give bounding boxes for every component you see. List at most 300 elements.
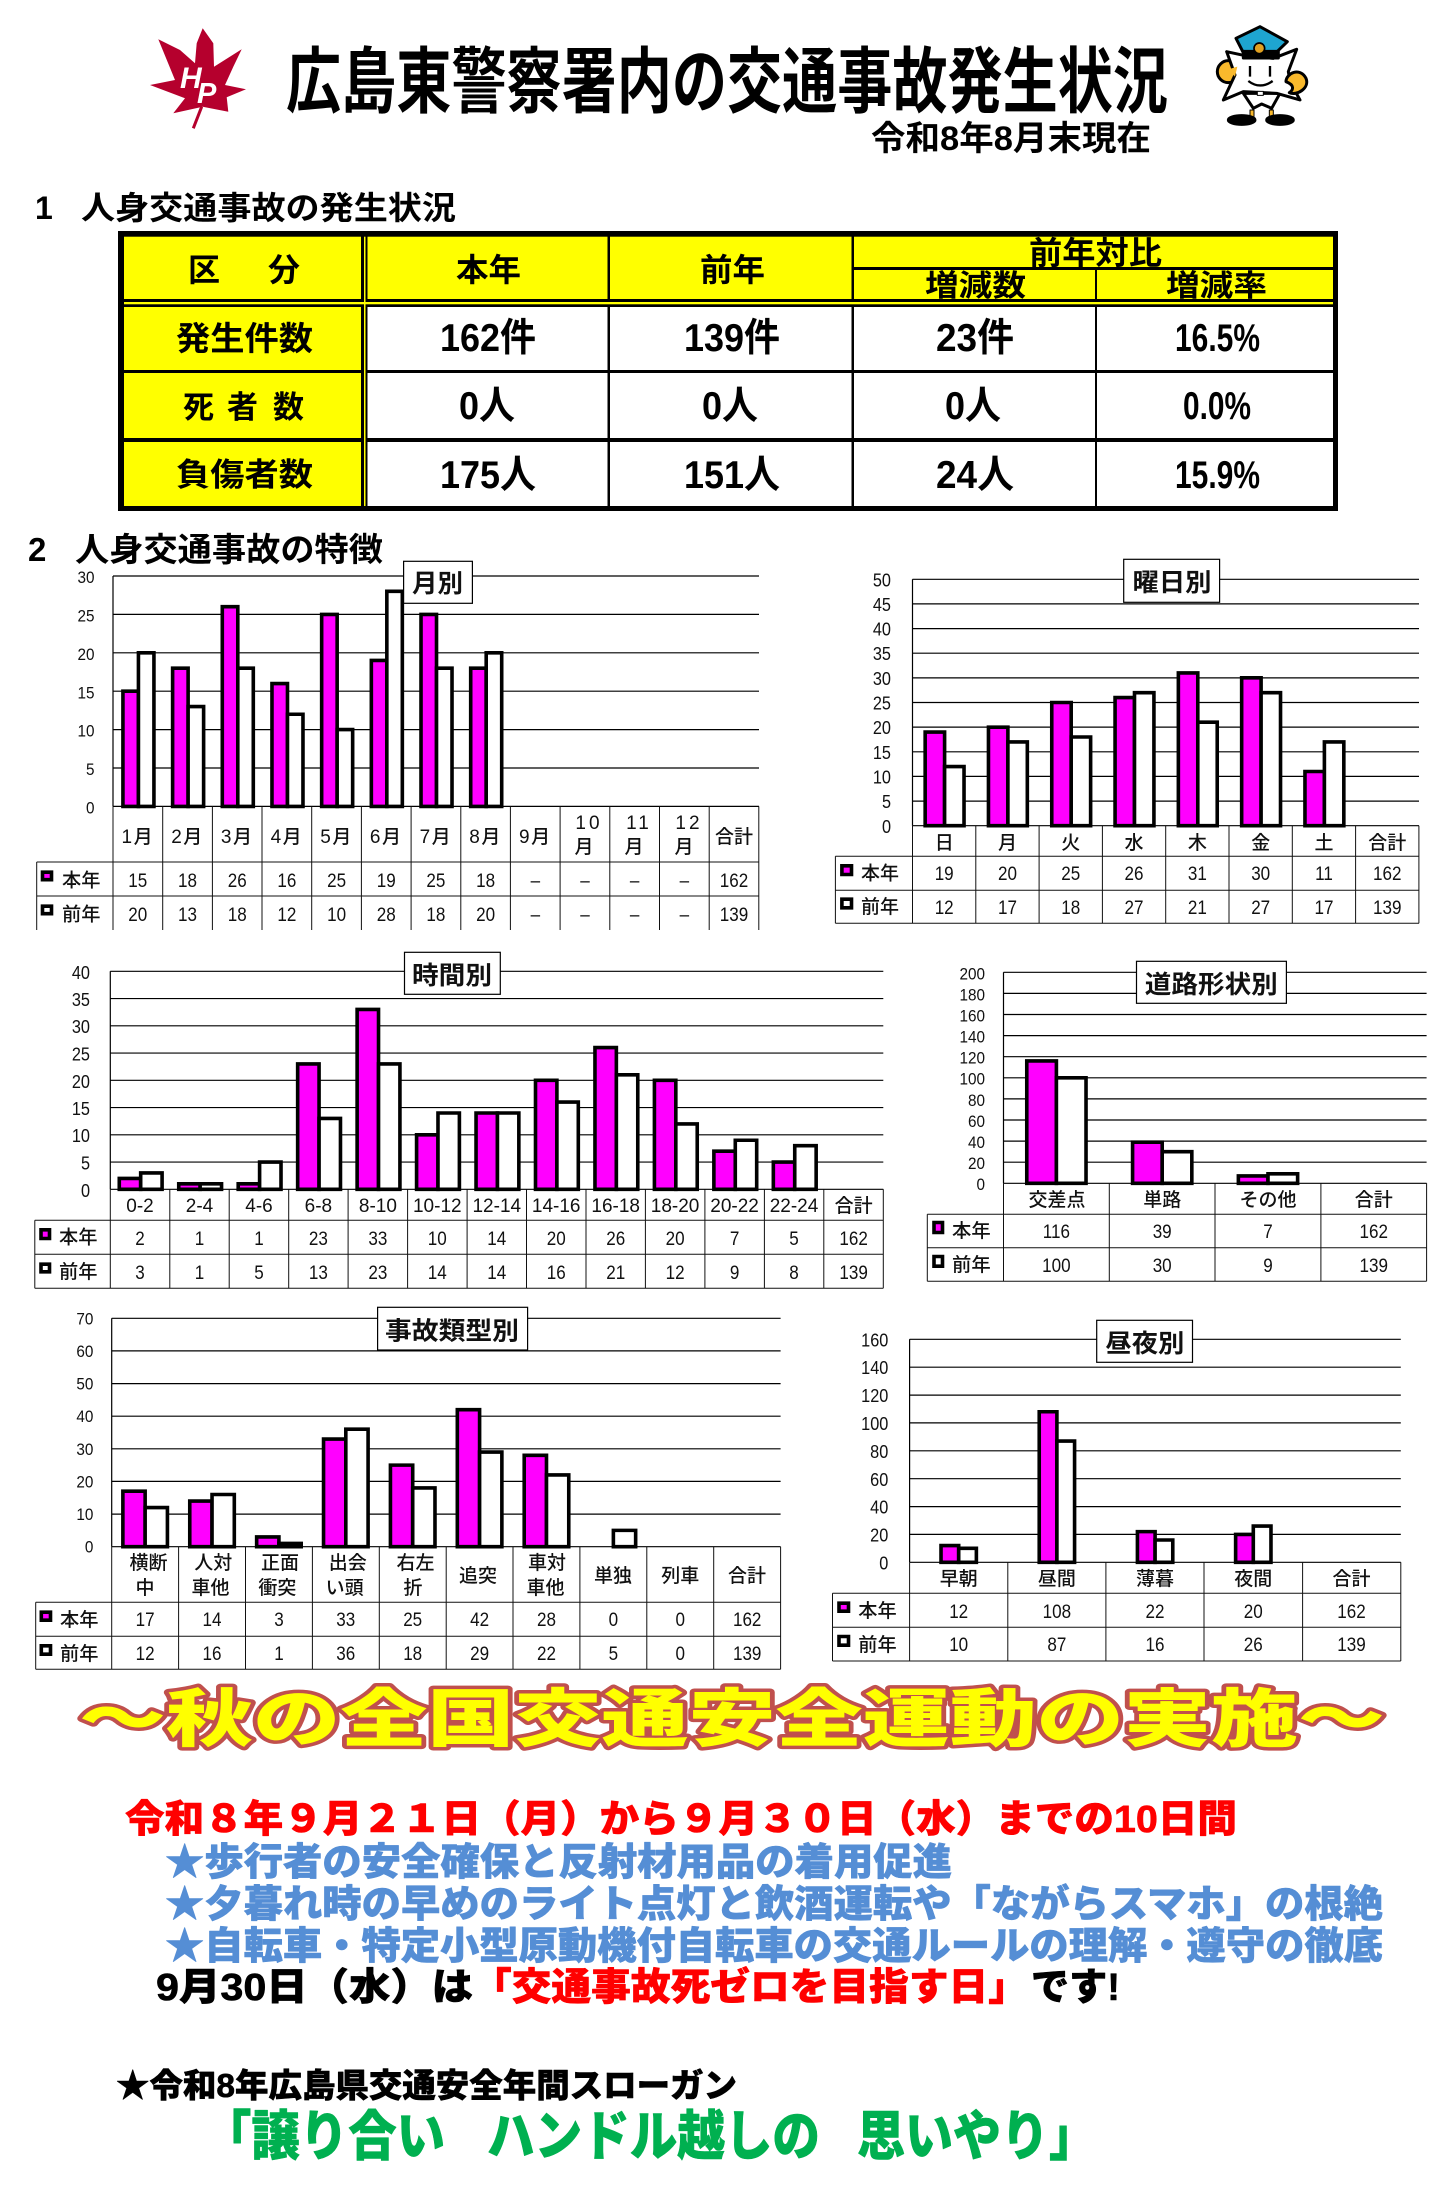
month labels: 11 [626,813,652,834]
time-band labels: 6-8 [305,1196,332,1217]
row: 本年: 0 [609,1608,618,1630]
row: 本年: 本年 [952,1220,991,1242]
row: 前年: 前年 [952,1254,991,1276]
y axis labels: 40 [76,1407,93,1426]
time-band labels: 12-14 [472,1196,522,1217]
row: 前年: 139 [1337,1633,1366,1655]
row: 前年 [934,1254,1388,1276]
row: 本年: – [630,869,640,891]
row: 本年: 2 [135,1227,145,1249]
chart title: 昼夜別 [1097,1320,1192,1362]
bars: monthly counts [123,591,502,806]
panel: accident summary table [118,231,1338,511]
y axis labels: 80 [870,1441,888,1462]
y axis labels: 25 [873,693,891,714]
slogan: 思いやり」 [857,2107,1097,2167]
campaign point 1: ★歩行者の安全確保と反射材用品の着用促進 [165,1842,952,1884]
heading: section 2: 人身交通事故の特徴 [75,531,383,568]
table row: 死者数: 0人 [702,385,758,428]
row: 前年: 13 [178,903,197,925]
y axis labels: 70 [76,1310,93,1329]
road-shape labels: 交差点 [1028,1189,1086,1211]
y axis labels [861,1330,888,1574]
row: 前年: 100 [1042,1254,1071,1276]
row: 本年: – [580,869,591,891]
row: 本年: 26 [1125,862,1143,884]
y axis labels: 5 [86,760,94,779]
accident-type labels [129,1552,766,1599]
time-band labels: 18-20 [651,1196,699,1217]
y axis labels: 60 [968,1112,985,1131]
row: 本年: 本年 [858,1600,897,1622]
table row: 死者数: 0人 [459,385,515,428]
row: 前年: 87 [1047,1633,1066,1655]
row: 前年: 14 [487,1261,506,1283]
table row: 発生件数: 23件 [936,317,1014,360]
time-band labels: 合計 [835,1195,873,1217]
slogan [203,2107,1097,2167]
row: 前年: 21 [606,1261,625,1283]
row: 前年: 12 [666,1261,685,1283]
y axis labels [77,568,95,818]
table row: 死者数: 0.0% [1183,385,1251,428]
y axis labels: 45 [873,594,891,615]
row: 本年: 11 [1315,862,1333,884]
row: 前年: 27 [1251,896,1270,918]
row: 本年: 162 [733,1608,761,1630]
row: 前年 [842,896,1402,918]
row: 前年: 18 [1061,896,1080,918]
y axis labels: 40 [870,1497,888,1518]
panel: chart by time of day [35,952,883,1288]
row: 本年: 25 [403,1608,422,1630]
y axis labels: 30 [76,1440,93,1459]
row: 前年 [41,1642,761,1665]
y axis labels: 180 [959,986,985,1005]
month labels: 3月 [221,827,253,848]
y axis labels: 50 [76,1375,93,1394]
row: 前年: 5 [609,1642,618,1664]
row: 前年: 17 [1315,896,1333,918]
y axis labels: 5 [882,791,891,812]
chart title: 月別: 月別 [412,570,463,598]
row: 本年: 20 [998,862,1017,884]
row: 本年: 10 [428,1227,447,1249]
y axis labels: 20 [873,717,891,738]
row: 本年: – [531,869,541,891]
row: 本年: 16 [277,869,296,891]
row: 本年: 162 [1337,1600,1366,1622]
row: 本年: – [680,869,690,891]
row: 前年: 8 [789,1261,799,1283]
row: 本年: 162 [839,1227,868,1249]
y axis labels: 0 [882,816,891,837]
row: 前年: 0 [676,1642,685,1664]
row: 前年: 前年 [60,1643,98,1665]
row: 本年: 5 [789,1227,799,1249]
accident-type labels: 右左 [396,1552,435,1574]
row: 本年: 18 [178,869,197,891]
row: 前年: 18 [426,903,445,925]
month labels: 6月 [370,827,402,848]
time-period labels: 昼間 [1038,1569,1076,1590]
row: 前年: 30 [1153,1254,1172,1276]
time-band labels: 4-6 [245,1196,273,1217]
y axis labels: 20 [77,645,95,664]
row: 前年: 20 [128,903,147,925]
y axis labels: 0 [85,1538,93,1557]
table row: 発生件数: 162件 [440,317,536,360]
accident-type labels: 人対 [194,1552,232,1574]
row: 前年: 16 [1146,1633,1164,1655]
row: 前年: 10 [949,1633,968,1655]
y axis labels: 0 [879,1553,888,1574]
row: 本年 [41,1608,761,1631]
chart title: 昼夜別: 昼夜別 [1105,1330,1184,1358]
chart title: 事故類型別 [378,1307,528,1350]
y axis labels: 15 [77,684,95,703]
row: 本年: 162 [720,869,748,891]
table row: 負傷者数: 15.9% [1175,454,1260,497]
y axis labels: 20 [72,1071,90,1092]
icon: maple leaf HP logo: P [197,78,217,110]
y axis labels: 40 [968,1133,985,1152]
campaign dates: 令和８年９月２１日（月）から９月３０日（水）までの10日間 [125,1799,1237,1841]
time-period labels: 合計 [1332,1568,1371,1590]
accident-type labels: い頭 [326,1578,364,1599]
y axis labels: 120 [861,1385,888,1406]
y axis labels: 100 [861,1413,888,1434]
y axis labels: 60 [76,1342,93,1361]
row: 前年 [41,1261,868,1283]
row: 本年: 7 [730,1227,739,1249]
row: 前年: 前年 [59,1261,98,1283]
row: 前年: 12 [136,1642,155,1664]
month labels: 月 [624,837,644,858]
row: 本年: 108 [1043,1600,1071,1622]
banner: autumn traffic safety campaign: 〜秋の全国交通安全運動の実施〜 [79,1685,1385,1755]
time-band labels: 8-10 [359,1196,397,1217]
row: 本年 [41,1226,868,1249]
table row: 発生件数: 16.5% [1175,317,1260,360]
chart title: 事故類型別: 事故類型別 [385,1318,519,1346]
panel: chart by day and night [832,1320,1401,1661]
y axis labels: 5 [81,1153,90,1174]
icon: maple leaf HP logo [150,28,246,128]
month labels: 9月 [519,827,552,848]
y axis labels: 20 [968,1154,985,1173]
row: 本年: 26 [606,1227,625,1249]
row: 前年: 9 [730,1261,739,1283]
heading: section 2: 2 [28,531,46,568]
row: 前年: 23 [368,1261,387,1283]
row: 前年: 17 [998,896,1017,918]
row: 前年: 27 [1125,896,1143,918]
row: 本年: 33 [368,1227,387,1249]
y axis labels: 200 [959,965,985,984]
row: 本年: 本年 [60,1609,98,1631]
table row: 負傷者数 [176,454,1260,497]
y axis labels [959,965,985,1194]
table header row: 区分 [188,252,300,288]
month labels: 10 [575,813,603,834]
row: 前年: 前年 [62,904,100,926]
y axis labels [76,1310,93,1557]
month labels: 合計 [715,826,753,848]
accident-type labels: 合計 [728,1565,766,1587]
y axis labels: 140 [959,1028,985,1047]
zero fatality day message: 9月30日（水）は [156,1967,473,2009]
row: 本年: 25 [327,869,346,891]
row: 前年: 26 [1244,1633,1263,1655]
row: 本年: 162 [1373,862,1402,884]
panel: chart by accident type [36,1307,781,1669]
month labels: 月 [574,837,594,858]
chart title: 月別 [404,561,472,603]
weekday labels: 合計 [1368,832,1406,854]
bars: day-night counts [941,1412,1271,1562]
row: 本年: 28 [537,1608,556,1630]
row: 前年: 12 [277,903,296,925]
y axis labels [873,570,891,837]
icon: police mascot [1217,27,1307,124]
table header row: 前年対比 [1029,235,1162,271]
icon: maple leaf HP logo: H [180,62,203,95]
y axis labels: 140 [861,1357,888,1378]
row: 本年: 23 [309,1227,328,1249]
table header row: 本年 [456,252,521,288]
bars: time-of-day counts [119,1009,816,1189]
time-period labels: 夜間 [1234,1568,1272,1590]
weekday labels: 月 [998,833,1017,854]
road-shape labels: 単路 [1143,1189,1181,1211]
row: 前年 [42,903,748,926]
accident-type labels: 折 [403,1577,423,1599]
row: 前年: 139 [733,1642,761,1664]
row: 本年: 12 [949,1600,968,1622]
y axis labels: 0 [86,799,94,818]
road-shape labels [1028,1189,1393,1211]
row: 前年: 28 [377,903,396,925]
y axis labels: 10 [76,1505,93,1524]
table header row: 増減率 [1166,270,1267,303]
time-period labels: 早朝 [940,1568,978,1590]
accident-type labels: 車対 [528,1552,566,1574]
row: 前年: 16 [203,1642,221,1664]
row: 本年: 本年 [59,1226,98,1248]
weekday labels: 金 [1251,832,1270,854]
row: 前年: – [531,903,541,925]
table row: 負傷者数: 175人 [440,454,536,497]
row: 本年: 25 [426,869,445,891]
y axis labels: 10 [873,767,891,788]
row: 前年: – [630,903,640,925]
table row: 発生件数: 発生件数 [176,320,313,357]
table row: 負傷者数: 負傷者数 [176,456,313,492]
accident-type labels: 車他 [191,1577,230,1599]
accident-type labels: 衝突 [258,1577,296,1599]
row: 前年: 36 [336,1642,355,1664]
row: 本年: 20 [547,1227,566,1249]
row: 前年: 139 [1373,896,1402,918]
row: 前年: 1 [274,1642,284,1664]
row: 前年: 1 [195,1261,204,1283]
y axis labels: 40 [873,619,891,640]
y axis labels: 160 [861,1330,888,1351]
y axis labels: 50 [873,570,891,591]
zero fatality day message [156,1966,1120,2009]
month labels: 5月 [320,827,353,848]
table header row [188,235,1267,303]
weekday labels: 水 [1124,832,1144,854]
month labels [122,813,753,858]
chart title: 道路形状別: 道路形状別 [1145,971,1278,999]
row: 本年 [839,1600,1366,1622]
panel: chart by month [37,561,759,930]
row: 前年 [839,1633,1366,1656]
row: 本年: 26 [228,869,247,891]
zero fatality day message: 「交通事故死ゼロを目指す日」 [472,1966,1028,2009]
row: 前年: 13 [309,1261,328,1283]
row: 前年: 10 [327,903,346,925]
table row: 死者数: 死者数 [183,390,304,425]
chart title: 曜日別 [1124,559,1220,602]
time-band labels: 16-18 [591,1196,640,1217]
y axis labels: 120 [959,1049,985,1068]
table header row: 増減数 [925,270,1026,303]
row: 前年: 14 [428,1261,447,1283]
time-band labels: 2-4 [186,1196,214,1217]
row: 本年 [842,862,1402,884]
row: 本年: 116 [1043,1220,1070,1242]
weekday labels: 土 [1314,832,1334,854]
row: 本年: 42 [470,1608,489,1630]
row: 本年 [42,869,748,892]
y axis labels: 40 [72,962,90,983]
month labels: 4月 [271,827,303,848]
row: 本年: 20 [1244,1600,1263,1622]
row: 本年: 22 [1146,1600,1164,1622]
row: 本年: 本年 [62,870,100,892]
table row: 発生件数: 139件 [684,317,780,360]
row: 前年: 20 [476,903,495,925]
accident-type labels: 列車 [661,1565,699,1587]
row: 前年: 5 [254,1261,264,1283]
slogan: 「譲り合い [203,2107,445,2167]
y axis labels: 30 [77,568,95,587]
zero fatality day message: です! [1031,1967,1120,2009]
month labels: 7月 [420,827,452,848]
row: 本年: 39 [1153,1220,1172,1242]
accident-type labels: 出会 [329,1552,367,1574]
row: 本年: 17 [136,1608,155,1630]
y axis labels: 0 [976,1175,985,1194]
table row: 負傷者数: 151人 [684,454,780,497]
row: 前年: – [680,903,690,925]
row: 本年: 0 [676,1608,685,1630]
y axis labels: 25 [72,1044,90,1065]
heading: section 1: 人身交通事故の発生状況 [81,190,456,226]
time-band labels: 10-12 [413,1196,462,1217]
row: 前年: 139 [1360,1254,1388,1276]
y axis labels: 30 [72,1016,90,1037]
road-shape labels: 合計 [1355,1189,1393,1211]
row: 本年: 1 [195,1227,204,1249]
title: 広島東警察署内の交通事故発生状況 [286,43,1168,123]
chart title: 時間別: 時間別 [412,962,492,990]
y axis labels: 20 [76,1473,93,1492]
y axis labels: 80 [968,1091,985,1110]
row: 前年: 前年 [858,1634,897,1656]
time-band labels: 22-24 [770,1196,819,1217]
row: 前年: 18 [403,1642,422,1664]
row: 本年: 本年 [861,862,899,884]
y axis labels: 30 [873,668,891,689]
y axis labels: 20 [870,1525,888,1546]
table row: 負傷者数: 24人 [936,454,1014,497]
row: 本年: 20 [666,1227,685,1249]
row: 本年: 18 [476,869,495,891]
y axis labels [72,962,90,1201]
month labels: 1月 [122,827,154,848]
bars: weekday counts [925,673,1344,826]
row: 本年: 30 [1251,862,1270,884]
row: 本年 [934,1220,1388,1242]
weekday labels: 日 [935,833,954,854]
y axis labels: 15 [72,1098,90,1119]
y axis labels: 35 [72,989,90,1010]
campaign point 3: ★自転車・特定小型原動機付自転車の交通ルールの理解・遵守の徹底 [165,1926,1383,1968]
table row: 死者数: 0人 [945,385,1001,428]
time-band labels: 20-22 [710,1196,759,1217]
accident-type labels: 横断 [129,1552,168,1574]
y axis labels: 10 [72,1125,90,1146]
month labels: 8月 [469,827,502,848]
heading: section 1: 1 [35,190,53,226]
slogan: ハンドル越しの [487,2107,820,2167]
row: 前年: 139 [720,903,748,925]
row: 前年: 3 [135,1261,145,1283]
weekday labels: 木 [1188,832,1207,854]
row: 本年: 7 [1263,1220,1273,1242]
time-band labels [126,1195,873,1217]
row: 前年: – [580,903,591,925]
month labels: 12 [675,813,703,834]
row: 本年: 14 [203,1608,221,1630]
y axis labels: 60 [870,1469,888,1490]
month labels: 月 [674,837,694,858]
y axis labels: 100 [959,1070,985,1089]
y axis labels: 35 [873,643,891,664]
chart title: 道路形状別 [1136,961,1286,1003]
row: 前年: 29 [470,1642,489,1664]
table header row: 前年 [700,252,765,288]
row: 前年: 9 [1263,1254,1273,1276]
panel: chart by road shape [927,961,1427,1281]
y axis labels: 15 [873,742,891,763]
y axis labels: 10 [77,722,95,741]
weekday labels: 火 [1061,833,1080,854]
y axis labels: 160 [959,1007,985,1026]
chart title: 曜日別: 曜日別 [1132,569,1212,597]
row: 本年: 15 [128,869,147,891]
table row: 死者数 [183,385,1251,428]
row: 本年: 14 [487,1227,506,1249]
slogan heading: ★令和8年広島県交通安全年間スローガン [116,2067,737,2104]
row: 本年: 31 [1188,862,1207,884]
accident-type labels: 中 [135,1577,155,1599]
row: 前年: 前年 [861,896,899,918]
